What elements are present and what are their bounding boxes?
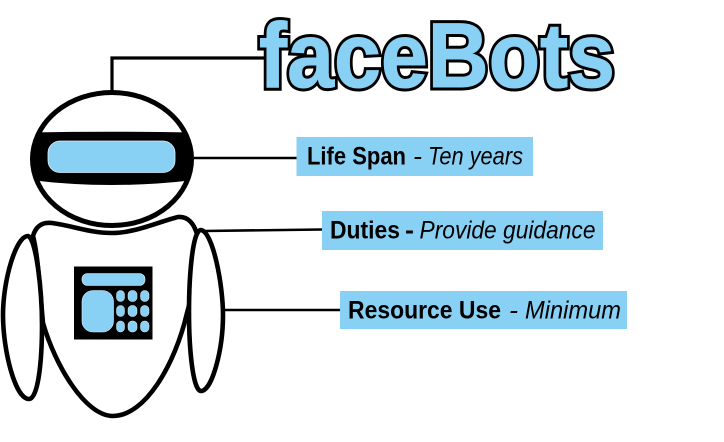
label: duties: - xyxy=(405,216,414,244)
robot left arm xyxy=(3,236,42,399)
label: life span xyxy=(296,137,533,176)
label: life span: Life Span xyxy=(307,142,406,170)
connector: arm to resource use xyxy=(224,309,340,311)
title: faceBots xyxy=(259,5,615,107)
connector: body to duties xyxy=(204,230,322,231)
robot body xyxy=(33,217,197,416)
label: resource use: - xyxy=(509,296,518,324)
label: resource use xyxy=(340,291,627,329)
label: duties xyxy=(322,211,603,250)
label: duties: Duties xyxy=(330,216,400,244)
label: life span: Ten years xyxy=(428,142,523,170)
panel screen xyxy=(82,290,114,332)
connector: title to head xyxy=(112,58,264,92)
label: resource use: Minimum xyxy=(525,296,621,324)
panel display bar xyxy=(82,274,145,286)
label: resource use: Resource Use xyxy=(348,296,501,324)
panel keypad xyxy=(116,290,149,332)
robot right arm xyxy=(189,230,223,391)
visor xyxy=(48,141,175,172)
infographic: faceBots robot diagram xyxy=(0,17,627,418)
connector: visor to life span xyxy=(192,157,297,159)
label: life span: - xyxy=(413,142,422,170)
robot head xyxy=(30,92,194,226)
label: duties: Provide guidance xyxy=(420,216,596,244)
chest control panel xyxy=(74,266,152,340)
head band xyxy=(30,132,194,185)
title: faceBots xyxy=(259,5,615,107)
